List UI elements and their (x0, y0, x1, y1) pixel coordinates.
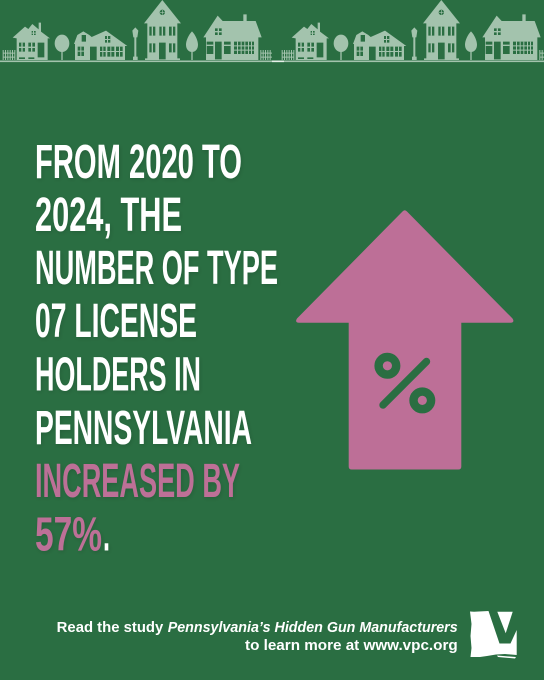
headline: 07 LICENSE (35, 295, 197, 348)
footer call to action: Read the study (57, 620, 163, 636)
headline: PENNSYLVANIA (35, 402, 252, 455)
headline: HOLDERS IN (35, 348, 201, 402)
percent sign (379, 357, 431, 409)
headline: NUMBER OF TYPE (35, 242, 278, 295)
houses row right (282, 0, 544, 60)
icon: VPC logo (470, 611, 517, 658)
headline: FROM 2020 TO (35, 136, 242, 189)
ground line (0, 60, 544, 62)
footer call to action: Pennsylvania’s Hidden Gun Manufacturers (168, 620, 458, 636)
houses row left (3, 0, 272, 60)
headline: 57% (35, 508, 102, 562)
headline (35, 136, 278, 562)
arrow (296, 210, 513, 470)
headline: 2024, THE (35, 189, 182, 242)
footer call to action (57, 620, 458, 654)
icon: up arrow with percent sign (296, 210, 513, 470)
headline: . (103, 508, 110, 562)
footer call to action: to learn more at www.vpc.org (245, 638, 458, 654)
ground line highlight (272, 60, 284, 62)
house skyline banner (0, 0, 544, 62)
headline: INCREASED BY (35, 455, 240, 508)
